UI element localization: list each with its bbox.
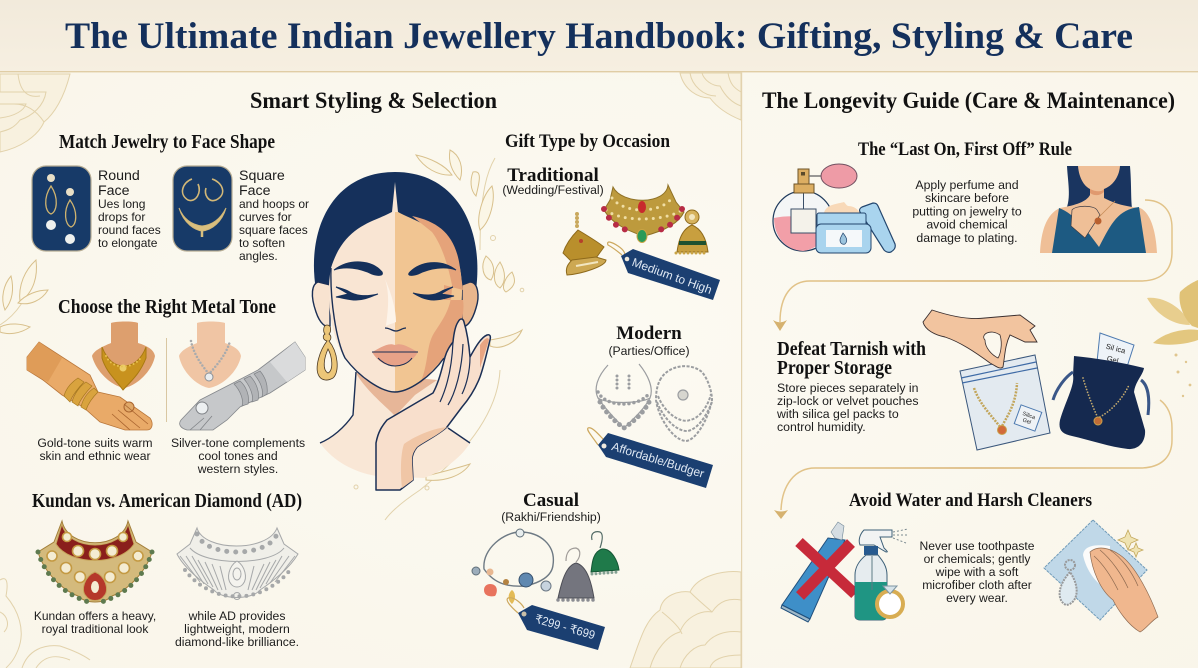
nostrils xyxy=(385,328,406,331)
illustration: hand holding zip bag xyxy=(923,310,1050,450)
illustration: velvet pouch: Gel xyxy=(1106,354,1120,366)
finger lines xyxy=(440,342,470,405)
text: silver tone caption: cool tones and xyxy=(198,449,278,463)
palm shadow xyxy=(401,427,447,488)
panel: Smart Styling & Selection xyxy=(27,88,720,650)
heading: Smart Styling & Selection: Smart Styling & Selection xyxy=(250,88,497,113)
illustration: velvet pouch xyxy=(1053,333,1149,449)
text: Casual: (Rakhi/Friendship) xyxy=(501,510,601,524)
text: Modern: Modern xyxy=(616,323,682,344)
illustration: charm bracelet xyxy=(472,529,553,604)
text: apply perfume: skincare before xyxy=(925,191,1009,205)
heading: Choose the Right Metal Tone: Choose the Right Metal Tone xyxy=(58,296,276,318)
text: round face: Round xyxy=(98,168,140,184)
text: silver tone caption xyxy=(171,436,305,476)
icon: spray bottle with ring xyxy=(855,529,908,620)
illustration: woman's face xyxy=(312,172,490,490)
text: round face: Ues long xyxy=(98,197,145,211)
heading: Defeat Tarnish: Proper Storage xyxy=(777,358,892,379)
heading: Match Jewelry to Face Shape: Match Jewelry to Face Shape xyxy=(59,131,275,153)
text: store pieces: with silica gel packs to xyxy=(776,407,899,421)
illustration: silver tone arm xyxy=(180,342,305,430)
text: square face: Face xyxy=(239,183,271,199)
decoration: bottom-centre mandala xyxy=(630,572,741,668)
closed eyes xyxy=(336,287,454,300)
illustration: traditional gold choker xyxy=(604,185,684,242)
decoration: top-left mandala xyxy=(0,74,70,152)
fingertip shading xyxy=(480,338,489,368)
illustration: hand holding zip bag: Silica xyxy=(1021,411,1037,422)
illustration: hand holding zip bag: Gel xyxy=(1022,417,1032,426)
text: square face: curves for xyxy=(239,210,292,224)
text: Traditional: (Wedding/Festival) xyxy=(502,183,604,197)
text: apply perfume: Apply perfume and xyxy=(915,178,1019,192)
decoration: top-right mandala xyxy=(680,73,741,120)
text: store pieces: control humidity. xyxy=(777,420,866,434)
text: Casual xyxy=(501,490,601,524)
text: kundan caption xyxy=(34,609,156,636)
text: AD caption: diamond-like brilliance. xyxy=(175,635,299,649)
icon: round face earrings tile xyxy=(32,166,91,251)
text: round face: Face xyxy=(98,183,130,199)
brows xyxy=(334,262,456,275)
face right half xyxy=(395,210,462,392)
illustration: silver jhumka xyxy=(558,548,595,600)
illustration: woman touching necklace xyxy=(1040,166,1157,253)
text: Modern: (Parties/Office) xyxy=(608,344,690,358)
text: square face: and hoops or xyxy=(239,197,309,211)
heading: The Longevity Guide: The Longevity Guide (Care & Maintenance) xyxy=(762,88,1175,113)
text: gold tone caption xyxy=(37,436,153,463)
heading: Gift Type by Occasion: Gift Type by Occasion xyxy=(505,132,671,152)
text: Traditional xyxy=(502,165,604,197)
text: never use toothpaste: Never use toothpaste xyxy=(920,539,1035,553)
heading: Last On First Off: The “Last On, First Off” Rule xyxy=(858,140,1072,160)
heading: Defeat Tarnish xyxy=(777,339,926,379)
title: The Ultimate Indian Jewellery Handbook: Gifting, Styling & Care xyxy=(65,16,1133,57)
neck and shoulders xyxy=(320,370,470,478)
illustration: velvet pouch: Sil ica xyxy=(1105,342,1127,356)
illustration: modern silver necklace set xyxy=(596,364,712,441)
text: kundan caption: royal traditional look xyxy=(42,622,149,636)
illustration: American Diamond necklace xyxy=(177,528,298,600)
illustration: silver necklace on bust xyxy=(179,322,241,388)
text: AD caption xyxy=(175,609,299,649)
icon: toothpaste crossed out xyxy=(781,522,855,622)
text: apply perfume xyxy=(912,178,1022,245)
illustration: gold jhumka left xyxy=(563,214,606,275)
decoration: left leaves xyxy=(0,260,48,334)
text: gold tone caption: Gold-tone suits warm xyxy=(37,436,153,450)
decoration: bottom-left vine xyxy=(0,579,90,668)
text: round face xyxy=(98,168,161,250)
decoration: centre botanical xyxy=(354,150,524,520)
text: AD caption: lightweight, modern xyxy=(184,622,290,636)
text: square face xyxy=(239,168,309,263)
lip lines xyxy=(372,352,418,366)
price tag: rupee range: ₹299 - ₹699 xyxy=(533,612,597,642)
header band xyxy=(0,0,1198,72)
earring xyxy=(317,325,337,380)
hair part xyxy=(392,182,398,212)
price tag: Medium to High xyxy=(608,242,720,300)
text: never use toothpaste: wipe with a soft xyxy=(935,565,1019,579)
decoration: right gold leaves xyxy=(1147,280,1198,397)
illustration: hand wiping with microfiber cloth xyxy=(1044,520,1158,632)
heading: Avoid Water: Avoid Water and Harsh Cleaners xyxy=(849,490,1092,511)
text: never use toothpaste: microfiber cloth after xyxy=(922,578,1032,592)
text: Traditional: Traditional xyxy=(507,165,599,186)
text: silver tone caption: western styles. xyxy=(197,462,278,476)
price tag: Affordable/Budger xyxy=(588,428,713,488)
text: store pieces xyxy=(776,381,919,434)
text: round face: round faces xyxy=(98,223,161,237)
panel: The Longevity Guide xyxy=(762,88,1175,632)
illustration: kundan necklace xyxy=(38,521,152,603)
text: kundan caption: Kundan offers a heavy, xyxy=(34,609,156,623)
text: square face: angles. xyxy=(239,249,278,263)
illustration: gold necklace on bust xyxy=(92,322,155,390)
text: silver tone caption: Silver-tone complements xyxy=(171,436,305,450)
arrow: to cleaners step xyxy=(774,400,1172,519)
ears xyxy=(312,282,330,326)
illustration: green jhumka xyxy=(591,532,619,574)
nose xyxy=(385,279,396,326)
lips xyxy=(372,344,418,366)
text: store pieces: Store pieces separately in xyxy=(777,381,919,395)
text: never use toothpaste: every wear. xyxy=(946,591,1008,605)
text: square face: Square xyxy=(239,168,285,184)
text: AD caption: while AD provides xyxy=(188,609,285,623)
text: square face: square faces xyxy=(239,223,308,237)
text: apply perfume: avoid chemical xyxy=(926,218,1008,232)
decoration: metal divider xyxy=(166,338,167,422)
arrow: to storage step xyxy=(773,200,1172,331)
text: Casual: Casual xyxy=(523,490,579,511)
illustration: gold jhumka right xyxy=(676,210,708,253)
price tag: Medium to High: Medium to High xyxy=(630,255,714,297)
text: apply perfume: damage to plating. xyxy=(916,231,1018,245)
icon: square face hoops tile xyxy=(173,166,232,251)
heading: Defeat Tarnish: Defeat Tarnish with xyxy=(777,339,926,360)
text: round face: to elongate xyxy=(98,236,158,250)
heading: Kundan vs. American Diamond: Kundan vs. American Diamond (AD) xyxy=(32,490,302,512)
price tag: Affordable/Budger: Affordable/Budger xyxy=(610,439,706,481)
hand xyxy=(376,319,490,490)
text: store pieces: zip-lock or velvet pouches xyxy=(777,394,918,408)
text: round face: drops for xyxy=(98,210,145,224)
text: Modern xyxy=(608,323,690,358)
text: never use toothpaste: or chemicals; gently xyxy=(924,552,1031,566)
cheek contour xyxy=(412,216,463,384)
text: square face: to soften xyxy=(239,236,285,250)
face left half xyxy=(329,210,395,392)
illustration: gold tone arm xyxy=(27,342,152,430)
price tag: rupee range xyxy=(507,598,605,650)
text: never use toothpaste xyxy=(920,539,1035,605)
text: gold tone caption: skin and ethnic wear xyxy=(39,449,151,463)
text: apply perfume: putting on jewelry to xyxy=(912,204,1022,218)
jawline xyxy=(331,268,444,392)
hair xyxy=(314,172,477,290)
icon: perfume bottle and cream jar xyxy=(773,164,895,253)
